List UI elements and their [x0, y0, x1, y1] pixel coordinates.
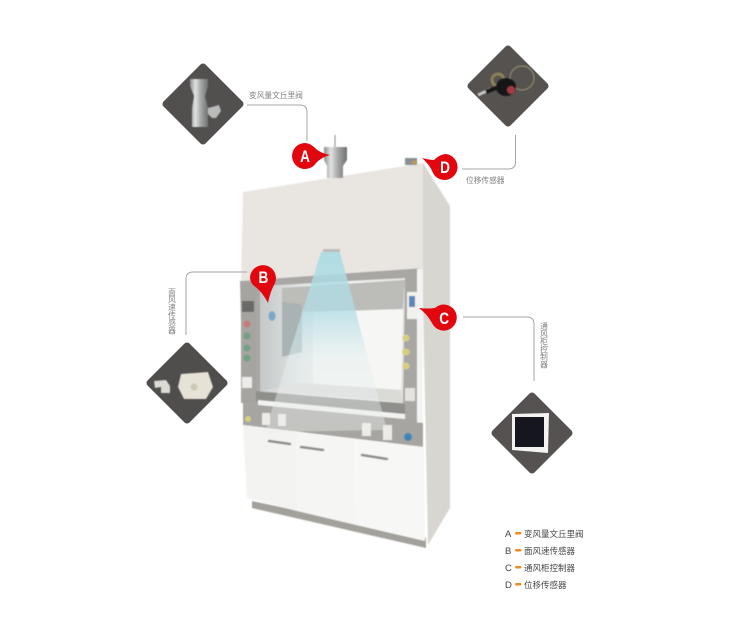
diamond: hood controller [495, 396, 569, 470]
connector C with label [463, 317, 548, 381]
marker D: D [440, 159, 450, 177]
legend item B: 面风速传感器 [524, 546, 576, 556]
hood lamp [323, 249, 340, 252]
legend item C: C [505, 563, 512, 574]
label: hood controller: 通风柜控制器 [539, 321, 548, 369]
marker A [292, 143, 330, 169]
label: venturi valve: 变风量文丘里阀 [249, 90, 303, 100]
lower service band [243, 404, 423, 447]
legend item B [505, 546, 576, 557]
diamond: face velocity sensor [150, 346, 224, 420]
legend item A [505, 529, 584, 540]
icon: controller screen [512, 413, 549, 453]
marker C [419, 305, 457, 331]
legend item C [505, 563, 576, 574]
marker D [422, 154, 458, 180]
light beam [265, 252, 387, 432]
marker B [250, 265, 276, 303]
legend item D: 位移传感器 [524, 580, 567, 590]
icon: venturi valve [190, 79, 221, 127]
diamond: displacement sensor [471, 49, 545, 123]
exhaust venturi [324, 135, 347, 178]
marker B: B [258, 269, 268, 287]
cabinet base plinth [252, 501, 426, 548]
connector B with label [167, 272, 247, 335]
icon: displacement sensor [478, 66, 534, 96]
label: displacement sensor: 位移传感器 [466, 175, 505, 185]
connector A with label [247, 90, 307, 141]
window glass [260, 278, 405, 403]
icon: face velocity sensor [154, 372, 213, 399]
marker C: C [439, 310, 449, 328]
top display sensor [405, 158, 417, 165]
legend item D [505, 580, 567, 591]
hood front panel [241, 163, 423, 281]
diamond: venturi valve [166, 67, 240, 141]
marker A: A [300, 148, 310, 166]
cabinet doors [243, 425, 425, 541]
legend item B: B [505, 546, 511, 557]
legend item A: A [505, 529, 512, 540]
legend [505, 529, 584, 591]
window interior floor [262, 383, 403, 402]
window interior left panel [282, 302, 302, 357]
legend item D: D [505, 580, 512, 591]
window frame background [240, 268, 423, 424]
cabinet side panel [423, 163, 450, 545]
window interior top shadow [282, 280, 405, 312]
right controller and knobs [402, 292, 417, 401]
label: face velocity sensor: 面风速传感器 [167, 288, 176, 335]
legend item A: 变风量文丘里阀 [524, 529, 584, 539]
window interior back wall [313, 309, 403, 390]
left control panel [241, 283, 256, 403]
sash bottom rail [254, 391, 405, 417]
right white strip [417, 268, 423, 424]
connector D with label [462, 135, 516, 185]
legend item C: 通风柜控制器 [524, 563, 576, 573]
fume hood cabinet [240, 135, 450, 548]
window sensor dot [268, 311, 276, 321]
